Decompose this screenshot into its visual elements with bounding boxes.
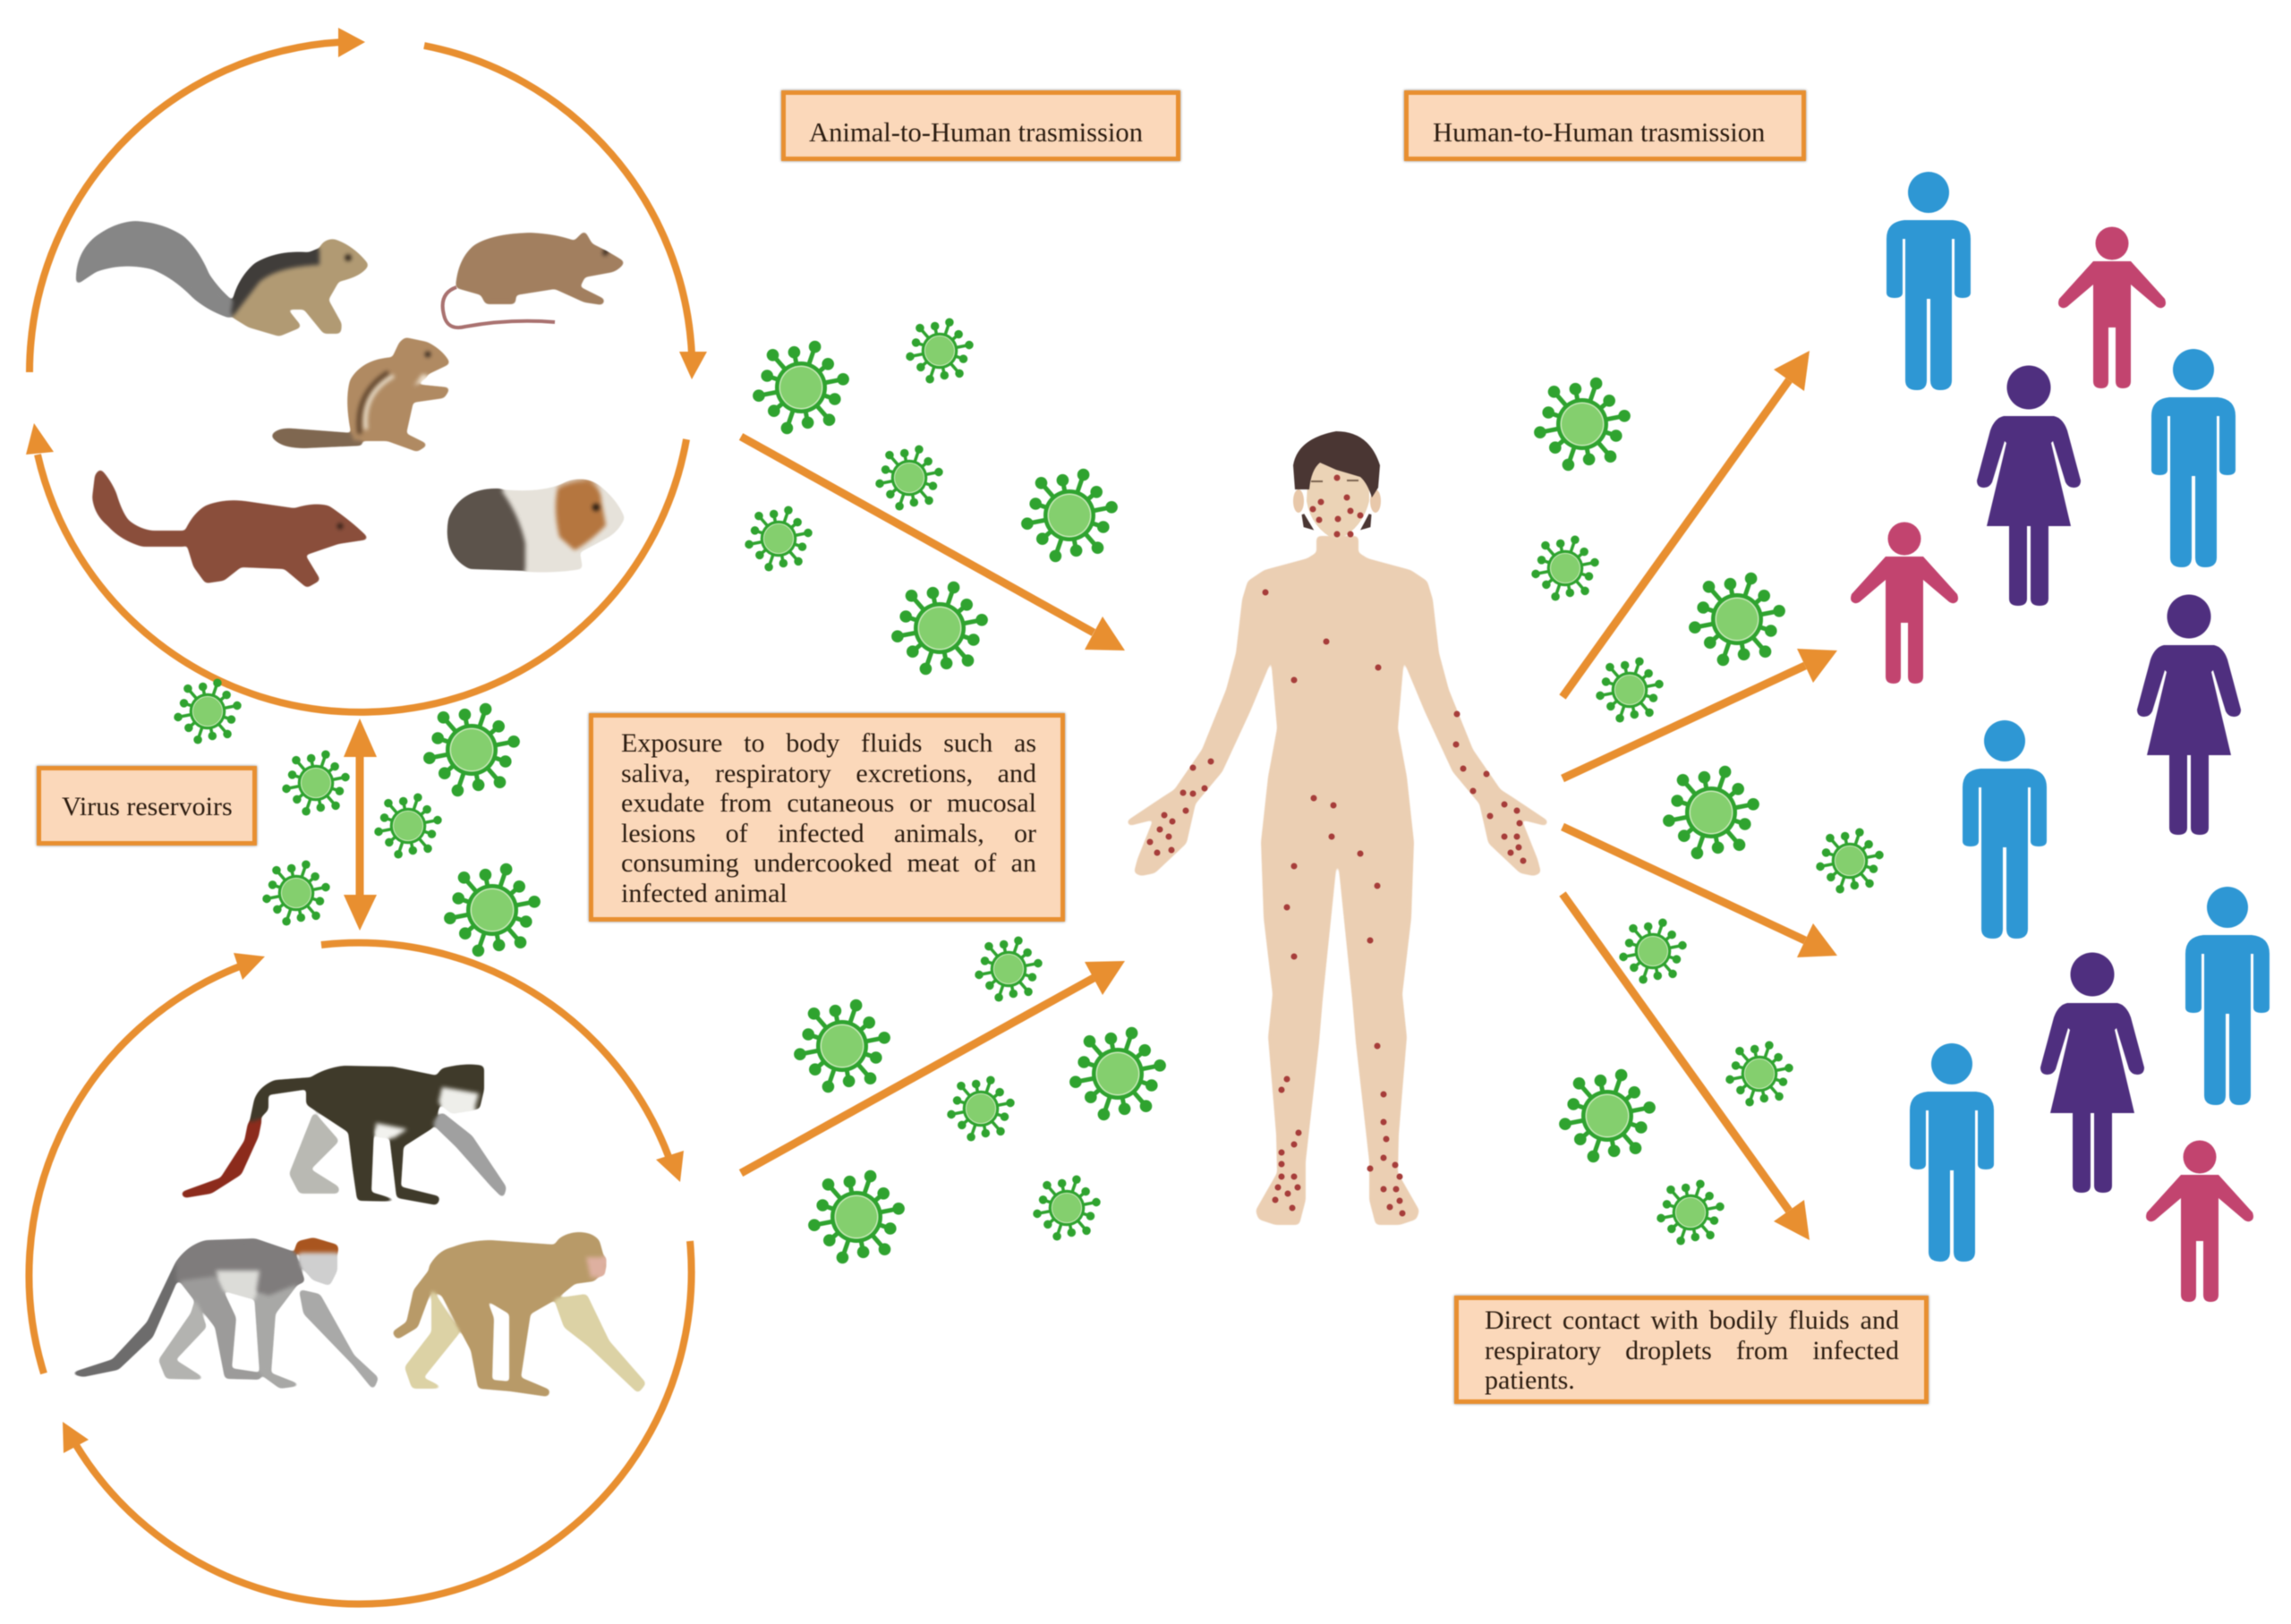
arrow: human to people 2 <box>1563 649 1837 778</box>
label: virus reservoirs <box>37 766 257 846</box>
arrow: human to people 4 <box>1563 894 1810 1240</box>
people group <box>1851 172 2270 1302</box>
text box: animal exposure: lesions of infected animals, or <box>621 819 1036 848</box>
head and hair <box>1293 431 1381 540</box>
label: virus reservoirs: Virus reservoirs <box>62 792 233 821</box>
text box: human contact <box>1454 1296 1929 1404</box>
arrow: animals to human (top) <box>741 437 1125 650</box>
text box: human contact: Direct contact with bodily fluids and <box>1485 1305 1899 1335</box>
animal: red-tailed monkey <box>182 1066 506 1204</box>
human figure with lesions <box>1128 431 1547 1224</box>
lesions <box>1150 478 1523 1213</box>
label: human-to-human: Human-to-Human trasmission <box>1433 117 1765 148</box>
text box: human contact: patients. <box>1485 1365 1575 1395</box>
text box: animal exposure: Exposure to body fluids such as <box>621 728 1036 758</box>
label: animal-to-human: Animal-to-Human trasmission <box>809 117 1143 148</box>
text box: animal exposure: consuming undercooked meat of an <box>621 848 1036 878</box>
text box: animal exposure: exudate from cutaneous or mucosal <box>621 788 1036 818</box>
animal: rhesus macaque <box>393 1233 645 1396</box>
double-headed vertical arrow <box>344 718 377 931</box>
animal: grey monkey <box>72 1238 378 1389</box>
men <box>1886 172 2270 1262</box>
text box: human contact: respiratory droplets from infected <box>1485 1336 1899 1365</box>
label: animal-to-human <box>781 90 1180 161</box>
animal: rat <box>443 232 624 327</box>
animal: guinea pig <box>448 480 624 572</box>
women <box>1977 365 2241 1193</box>
body <box>1128 537 1547 1224</box>
animal: shrew <box>93 470 368 587</box>
virus particles <box>174 318 1884 1263</box>
children <box>1851 227 2253 1302</box>
lower reservoir cycle arrows <box>29 943 692 1604</box>
label: human-to-human <box>1404 90 1806 161</box>
arrow: human to people 1 <box>1563 351 1810 697</box>
upper reservoir cycle arrows <box>26 28 707 712</box>
arrow: animals to human (bottom) <box>741 961 1125 1173</box>
animal: squirrel <box>77 222 368 336</box>
text box: animal exposure <box>589 713 1065 922</box>
animal: chipmunk <box>272 338 449 451</box>
text box: animal exposure: infected animal <box>621 879 788 908</box>
arrow: human to people 3 <box>1563 827 1837 957</box>
text box: animal exposure: saliva, respiratory excretions, and <box>621 759 1036 788</box>
